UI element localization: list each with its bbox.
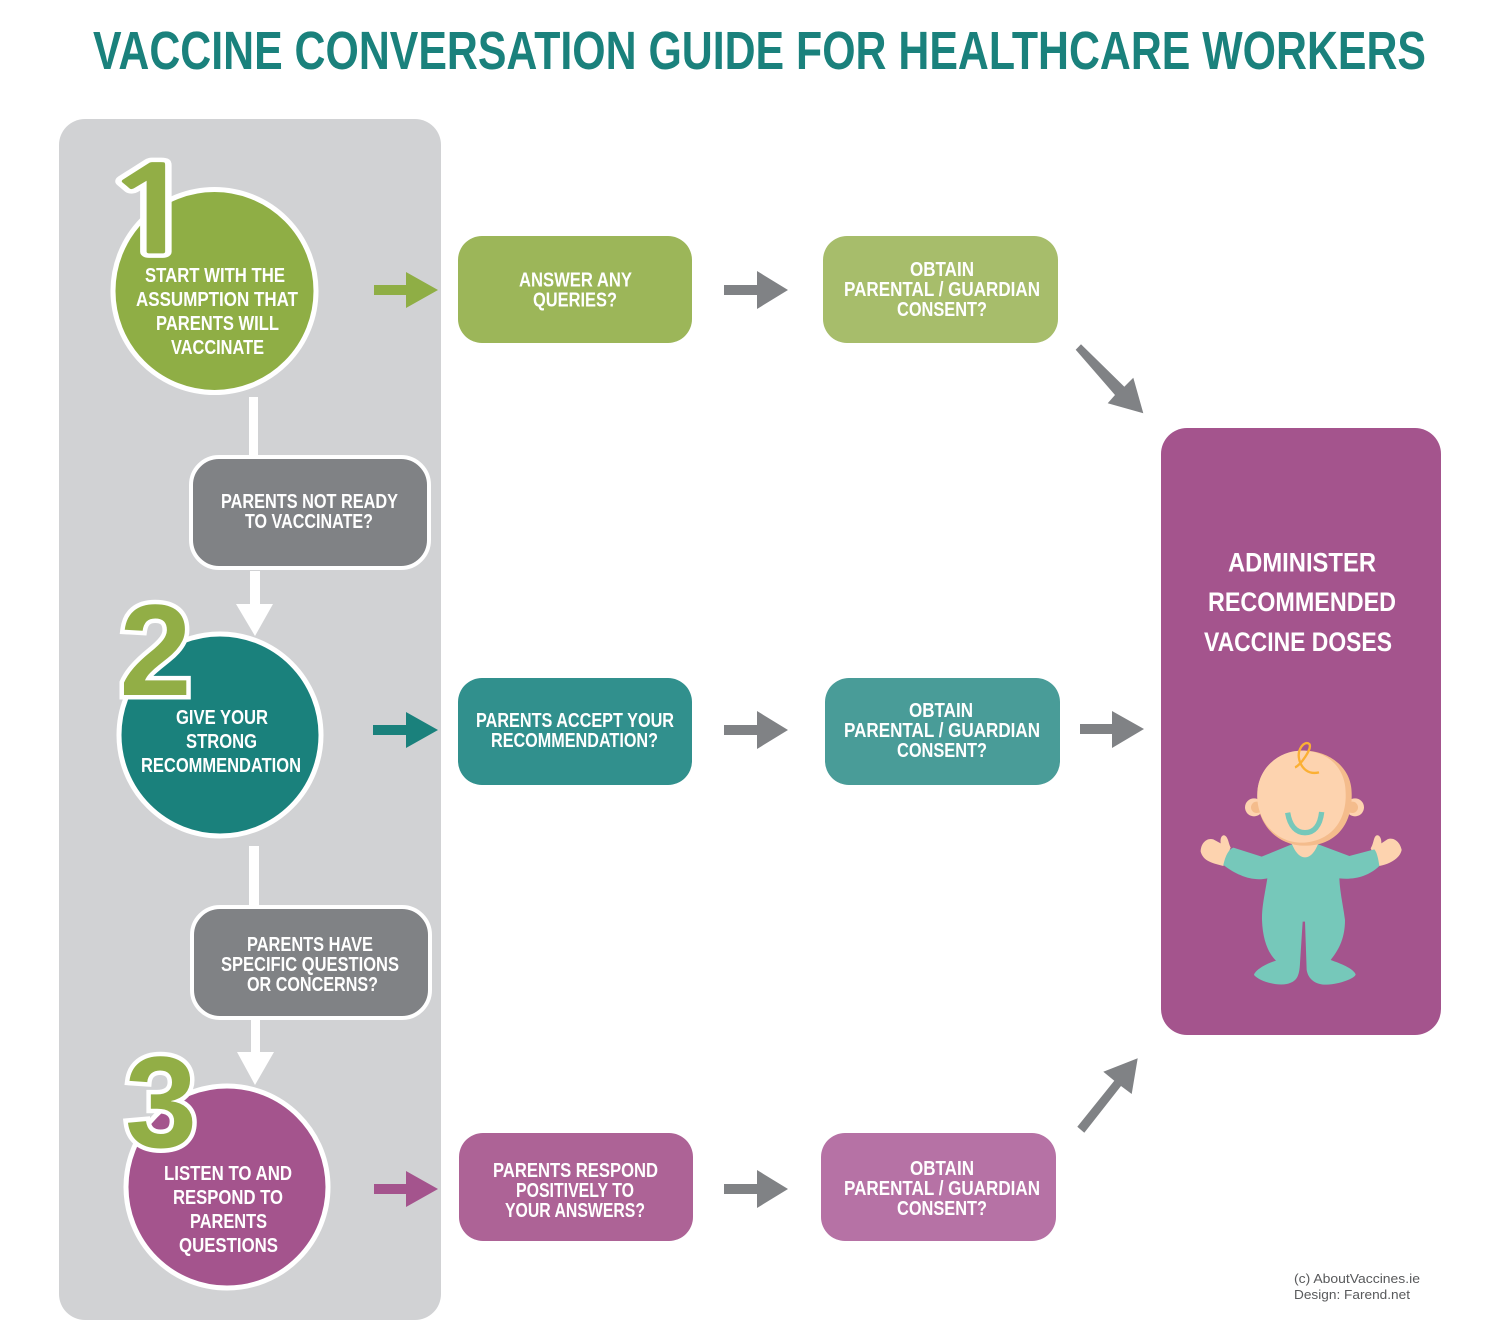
step 1 text: PARENTS WILL xyxy=(156,313,279,335)
step 1 text xyxy=(136,265,298,359)
question box: specific questions: PARENTS HAVE xyxy=(247,934,373,956)
panel: administer vaccine doses xyxy=(1161,428,1441,1035)
step 3 text: QUESTIONS xyxy=(179,1235,278,1257)
question box: specific questions: SPECIFIC QUESTIONS xyxy=(221,954,399,976)
question box: parents not ready xyxy=(191,457,429,568)
box: parents respond positively xyxy=(459,1133,693,1241)
box: obtain consent teal: PARENTAL / GUARDIAN xyxy=(844,720,1040,742)
circle: step 3 xyxy=(126,1086,328,1288)
box: obtain consent green: OBTAIN xyxy=(910,259,974,281)
arrow: grey row 2 xyxy=(724,711,788,749)
box: obtain consent teal xyxy=(825,678,1060,785)
step 2 text xyxy=(141,707,301,777)
step 3 text: RESPOND TO xyxy=(173,1187,283,1209)
question box: specific questions xyxy=(192,907,430,1018)
step 1 text: START WITH THE xyxy=(145,265,285,287)
outcome text xyxy=(1204,548,1396,657)
question box: parents not ready: PARENTS NOT READY xyxy=(221,491,399,513)
step 2 text: GIVE YOUR xyxy=(176,707,268,729)
step 1 xyxy=(100,152,316,392)
arrow: purple xyxy=(374,1171,438,1207)
number 1: 1 xyxy=(100,152,204,271)
step 2 text: RECOMMENDATION xyxy=(141,755,301,777)
arrow: grey row 1 xyxy=(724,271,788,309)
arrow: question to step 3 xyxy=(237,1020,274,1085)
box: obtain consent green: CONSENT? xyxy=(897,299,987,321)
outcome text: VACCINE DOSES xyxy=(1204,627,1392,657)
step 1 text: ASSUMPTION THAT xyxy=(136,289,298,311)
step 3 text xyxy=(164,1163,292,1257)
connector: step 2 to question xyxy=(249,846,259,905)
step 3 xyxy=(125,1029,328,1288)
connector: step 1 to question xyxy=(249,397,258,455)
arrow: grey row 3 xyxy=(724,1170,788,1208)
outcome text: RECOMMENDED xyxy=(1208,587,1396,617)
circle: step 2 xyxy=(119,634,321,836)
arrow: right to outcome xyxy=(1080,711,1144,748)
arrow: diagonal up to outcome xyxy=(1077,1058,1138,1133)
box: parents respond positively: PARENTS RESPOND xyxy=(493,1160,658,1182)
step 2 xyxy=(119,577,321,836)
circle: step 1 xyxy=(113,190,316,392)
box: obtain consent purple: CONSENT? xyxy=(897,1198,987,1220)
box: obtain consent purple xyxy=(821,1133,1056,1241)
credits: Design: Farend.net xyxy=(1294,1287,1410,1302)
box: parents accept recommendation xyxy=(458,678,692,785)
arrow: teal xyxy=(373,712,438,748)
box: parents accept recommendation: PARENTS ACCEPT YOUR xyxy=(476,710,674,732)
arrow: green xyxy=(374,272,438,308)
arrow: diagonal down to outcome xyxy=(1076,344,1143,413)
step 2 text: STRONG xyxy=(186,731,257,753)
step 3 text: LISTEN TO AND xyxy=(164,1163,292,1185)
box: obtain consent purple: OBTAIN xyxy=(910,1158,974,1180)
outcome text: ADMINISTER xyxy=(1228,548,1376,578)
box: answer any queries: QUERIES? xyxy=(533,290,617,312)
icon: baby xyxy=(1201,743,1402,985)
box: answer any queries: ANSWER ANY xyxy=(519,270,633,292)
credits xyxy=(1294,1271,1420,1302)
box: obtain consent green xyxy=(823,236,1058,343)
box: obtain consent purple: PARENTAL / GUARDIAN xyxy=(844,1178,1040,1200)
box: obtain consent green: PARENTAL / GUARDIAN xyxy=(844,279,1040,301)
step 3 text: PARENTS xyxy=(190,1211,267,1233)
box: obtain consent teal: OBTAIN xyxy=(909,700,973,722)
box: obtain consent teal: CONSENT? xyxy=(897,740,987,762)
box: parents accept recommendation: RECOMMENDATION? xyxy=(491,730,658,752)
credits: (c) AboutVaccines.ie xyxy=(1294,1271,1420,1286)
panel: conversation steps xyxy=(59,119,441,1320)
box: answer any queries xyxy=(458,236,692,343)
box: parents respond positively: POSITIVELY TO xyxy=(516,1180,634,1202)
step 1 text: VACCINATE xyxy=(171,337,264,359)
number 2: 2 xyxy=(120,577,192,723)
question box: specific questions: OR CONCERNS? xyxy=(247,974,378,996)
box: parents respond positively: YOUR ANSWERS? xyxy=(505,1200,645,1222)
arrow: question to step 2 xyxy=(236,571,273,636)
question box: parents not ready: TO VACCINATE? xyxy=(245,511,373,533)
number 3: 3 xyxy=(125,1029,197,1175)
